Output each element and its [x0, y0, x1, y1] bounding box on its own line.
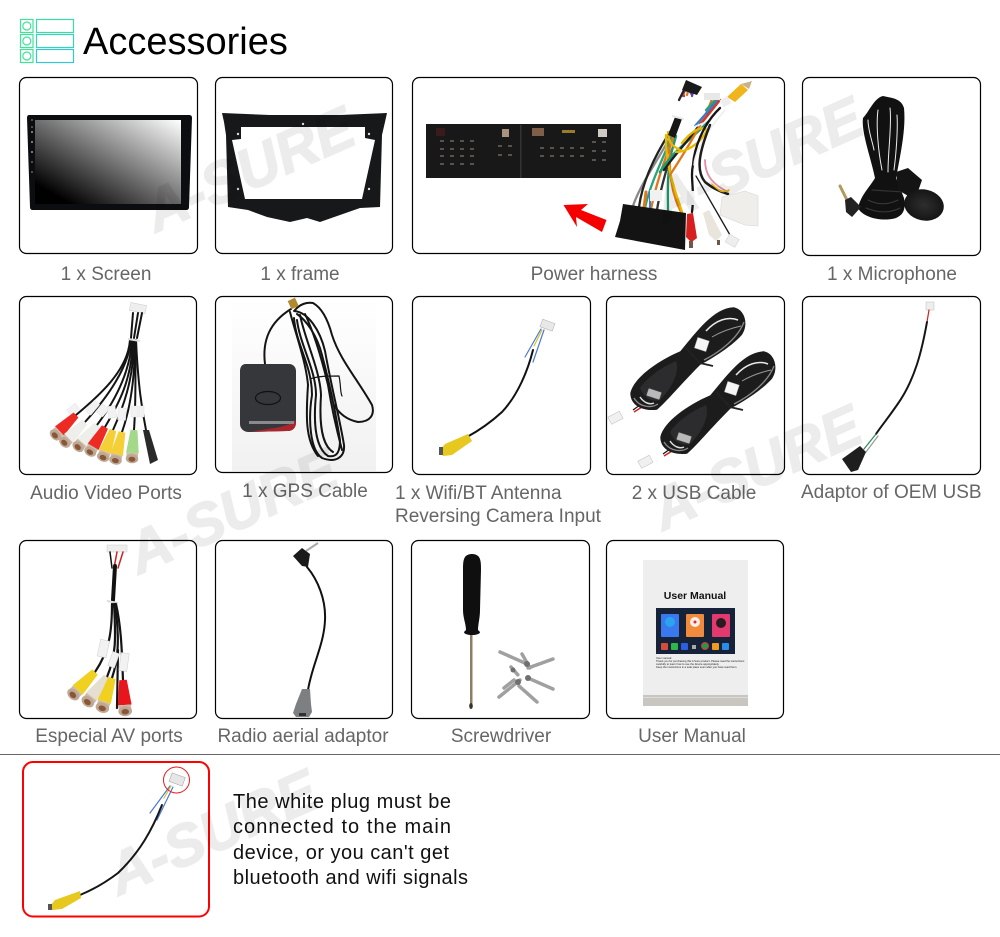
- label: Audio Video Ports: [30, 483, 182, 504]
- label second line: Reversing Camera Input: [395, 506, 602, 527]
- panel: microphone: [802, 78, 980, 285]
- label: 1 x Wifi/BT Antenna: [395, 483, 562, 504]
- usb cable two: [638, 351, 775, 468]
- manual fine print: User manual:: [656, 656, 672, 660]
- gps antenna: [240, 364, 296, 432]
- note text: device, or you can't get: [233, 842, 449, 864]
- label: Radio aerial adaptor: [217, 726, 389, 747]
- screwdriver: [463, 554, 481, 709]
- panel: oem usb adaptor: [801, 296, 982, 503]
- top connectors: [682, 80, 752, 107]
- rca plugs: [686, 210, 722, 248]
- antenna cable: [439, 319, 555, 456]
- note cable: [48, 773, 185, 910]
- label: Especial AV ports: [35, 726, 183, 747]
- arrow: red: [564, 204, 606, 232]
- gps photo backdrop: [232, 298, 376, 471]
- aerial cable: [293, 543, 325, 717]
- title text: Accessories: [83, 21, 288, 63]
- label: 1 x Screen: [61, 264, 151, 285]
- note text: The white plug must be: [233, 791, 451, 813]
- panel: frame: [216, 78, 392, 285]
- panel: screwdriver: [412, 540, 590, 747]
- panel: usb cables: [606, 296, 784, 504]
- panel: user manual: [606, 540, 784, 747]
- microphone foam: [896, 168, 947, 224]
- gps cable coil: [264, 303, 373, 460]
- tube sections: [650, 116, 704, 205]
- oem usb cable: [842, 302, 934, 472]
- label: Adaptor of OEM USB: [801, 482, 982, 503]
- screws: [499, 652, 553, 702]
- note text: connected to the main: [233, 816, 451, 838]
- label: 1 x frame: [260, 264, 340, 285]
- icon: list: [20, 20, 74, 62]
- manual booklet: [643, 560, 748, 706]
- label: Screwdriver: [451, 726, 552, 747]
- title heading: [20, 20, 288, 63]
- divider: [0, 754, 1000, 755]
- manual fine print: Thank you for purchasing this A Sure product. Please read the instructions: [656, 659, 745, 663]
- dash frame: [222, 113, 387, 222]
- note text: bluetooth and wifi signals: [233, 867, 468, 889]
- label: 1 x GPS Cable: [242, 481, 368, 502]
- panel: radio aerial adaptor: [216, 540, 392, 747]
- manual fine print: [656, 656, 745, 669]
- watermarks: A-SURE: [640, 392, 874, 544]
- panel: especial av ports: [20, 540, 196, 747]
- main connector: [615, 204, 686, 250]
- connector closeup: [426, 124, 621, 178]
- manual fine print: carefully to learn how to use the device appropriately.: [656, 662, 720, 666]
- watermarks: A-SURE: [116, 436, 350, 588]
- panel: screen: [20, 78, 198, 285]
- manual fine print: Keep the instructions in a safe place even after you have read them.: [656, 665, 737, 669]
- av cable bundle: [48, 302, 158, 466]
- gps connector: [288, 298, 299, 309]
- label: 1 x Microphone: [827, 264, 957, 285]
- wiring loom: [633, 84, 730, 235]
- usb cable one: [608, 307, 745, 424]
- watermarks: [96, 84, 875, 909]
- panel: power harness: [412, 78, 784, 285]
- manual title: User Manual: [664, 590, 726, 602]
- note text: [233, 791, 468, 889]
- watermarks: A-SURE: [96, 757, 330, 909]
- label: User Manual: [638, 726, 746, 747]
- panel: audio video ports: [20, 296, 196, 504]
- panel: white plug note: [23, 762, 209, 916]
- white connector: [720, 191, 758, 247]
- label: Power harness: [531, 264, 657, 285]
- highlight circle: [164, 767, 190, 793]
- watermarks: A-SURE: [133, 94, 367, 246]
- watermarks: A-SURE: [641, 84, 875, 236]
- microphone jack: [840, 186, 861, 217]
- screen device: [27, 115, 192, 210]
- microphone coil: [858, 96, 905, 220]
- panel: gps cable: [216, 296, 392, 502]
- label: 2 x USB Cable: [632, 483, 756, 504]
- panel: wifi bt antenna: [395, 296, 602, 527]
- manual screen: [656, 608, 735, 654]
- especial av cable: [65, 545, 132, 717]
